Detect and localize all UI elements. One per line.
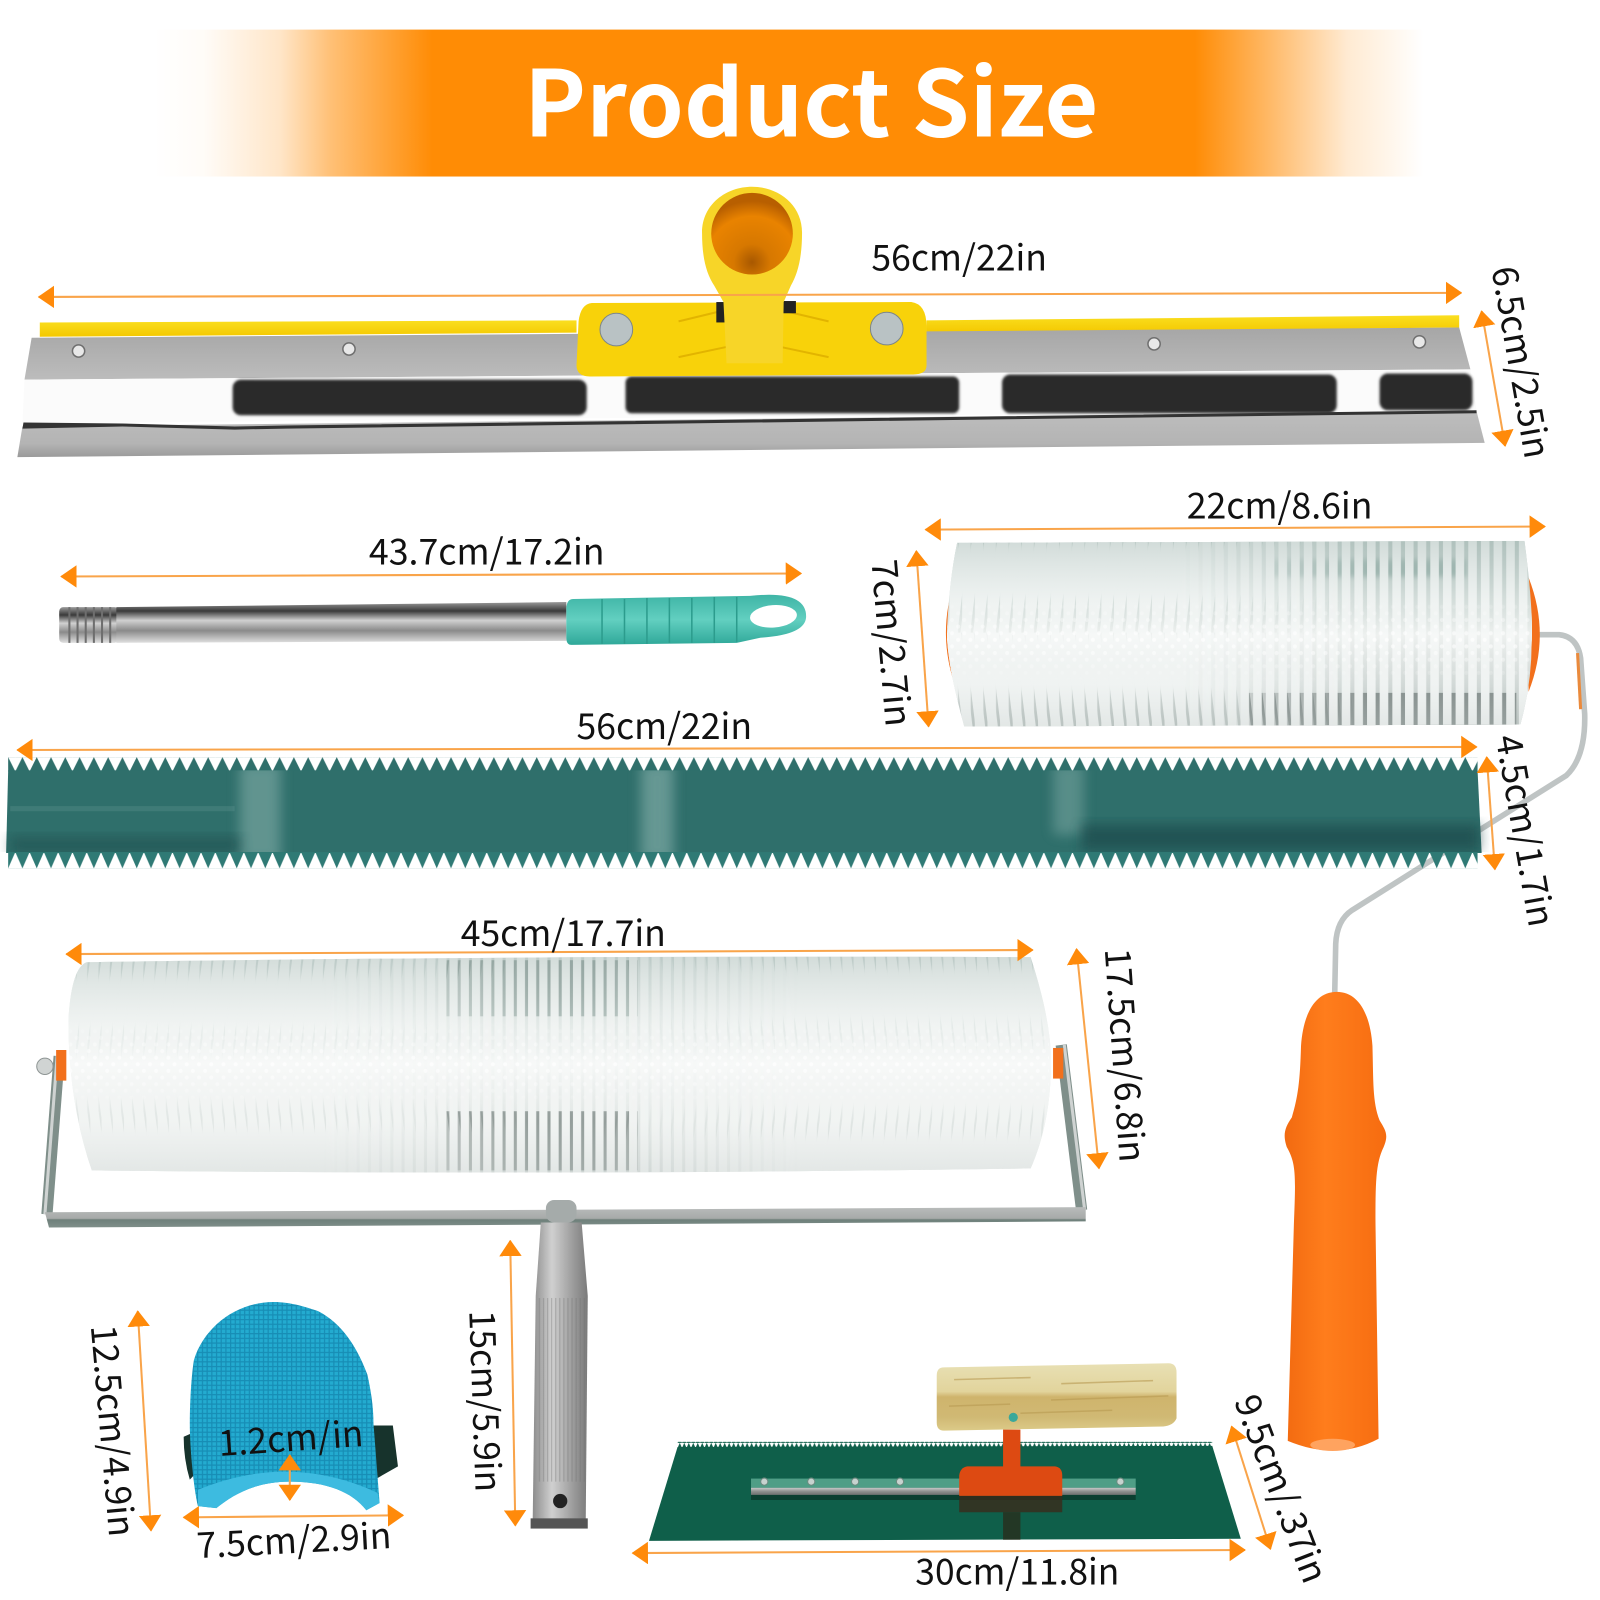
label: trowel width: 30cm/11.8in — [915, 1545, 1119, 1596]
label: small roller width: 22cm/8.6in — [1187, 478, 1372, 529]
title text: Product Size — [524, 31, 1098, 164]
arrow: knee pad thickness — [289, 1455, 291, 1500]
yellow holder plate — [577, 302, 927, 377]
large spiked roller — [37, 949, 1086, 1529]
dimension labels — [80, 230, 1569, 1596]
arrow: squeegee height — [1482, 311, 1505, 446]
steel upper band — [24, 328, 1470, 380]
label: T handle: 15cm/5.9in — [458, 1309, 516, 1493]
arrow: trowel width — [633, 1550, 1245, 1553]
arrow: small roller height — [916, 551, 929, 727]
orange roller ends — [946, 578, 1540, 692]
small spiked roller — [944, 536, 1541, 735]
mirror band — [22, 369, 1477, 423]
knee pad shell — [190, 1302, 380, 1510]
arrow: knee pad width — [184, 1515, 403, 1517]
arrow: trowel depth — [1232, 1427, 1270, 1549]
arrow: bar height — [1487, 757, 1495, 869]
rivets — [72, 336, 1426, 357]
label: squeegee height: 6.5cm/2.5in — [1481, 262, 1565, 462]
title banner — [153, 30, 1423, 177]
label: squeegee width: 56cm/22in — [871, 230, 1047, 281]
orange bracket — [959, 1430, 1062, 1496]
wood handle — [937, 1363, 1177, 1431]
label: pole length: 43.7cm/17.2in — [369, 524, 605, 575]
lower bevel — [17, 410, 1485, 457]
T handle — [531, 1200, 588, 1529]
yellow socket — [702, 187, 802, 363]
pole threaded tip — [59, 607, 118, 643]
label: bar height: 4.5cm/1.7in — [1485, 730, 1569, 930]
rake squeegee — [17, 187, 1485, 457]
dimension arrows — [17, 293, 1545, 1553]
arrow: bar length — [17, 747, 1477, 750]
arrow: pole length — [61, 573, 801, 577]
label: knee pad thickness: 1.2cm/in — [217, 1406, 365, 1467]
trowel blade — [649, 1442, 1241, 1541]
label: large roller height: 17.5cm/6.8in — [1094, 946, 1160, 1164]
label: trowel depth: 9.5cm/.37in — [1223, 1386, 1342, 1590]
yellow top strip — [40, 315, 1459, 337]
arrow: T handle — [510, 1241, 515, 1526]
knee pad rim — [198, 1472, 380, 1510]
label: small roller height: 7cm/2.7in — [860, 557, 926, 728]
label: large roller width: 45cm/17.7in — [461, 906, 666, 957]
teal grip — [566, 595, 806, 645]
notched scraper bar — [6, 757, 1482, 868]
arrow: squeegee width — [39, 293, 1461, 297]
extension pole — [59, 595, 806, 645]
label: bar length: 56cm/22in — [577, 699, 752, 750]
bar scuffs — [2, 770, 1489, 852]
large drum — [61, 949, 1061, 1179]
arrow: large roller height — [1077, 949, 1099, 1168]
label: knee pad height: 12.5cm/4.9in — [80, 1322, 149, 1538]
small roller wire frame — [1335, 635, 1585, 995]
steel rail — [751, 1478, 1136, 1495]
knee pad straps — [184, 1426, 398, 1480]
roller frame — [37, 1045, 1086, 1228]
arrow: knee pad height — [138, 1311, 151, 1531]
pole shaft — [116, 602, 566, 643]
knee pad — [184, 1302, 398, 1510]
spiked drum — [944, 536, 1541, 735]
arrow: large roller width — [66, 950, 1033, 954]
label: knee pad width: 7.5cm/2.9in — [195, 1508, 392, 1569]
notched trowel — [649, 1363, 1241, 1541]
orange paint roller handle — [1285, 992, 1386, 1451]
arrow: small roller width — [926, 527, 1545, 530]
